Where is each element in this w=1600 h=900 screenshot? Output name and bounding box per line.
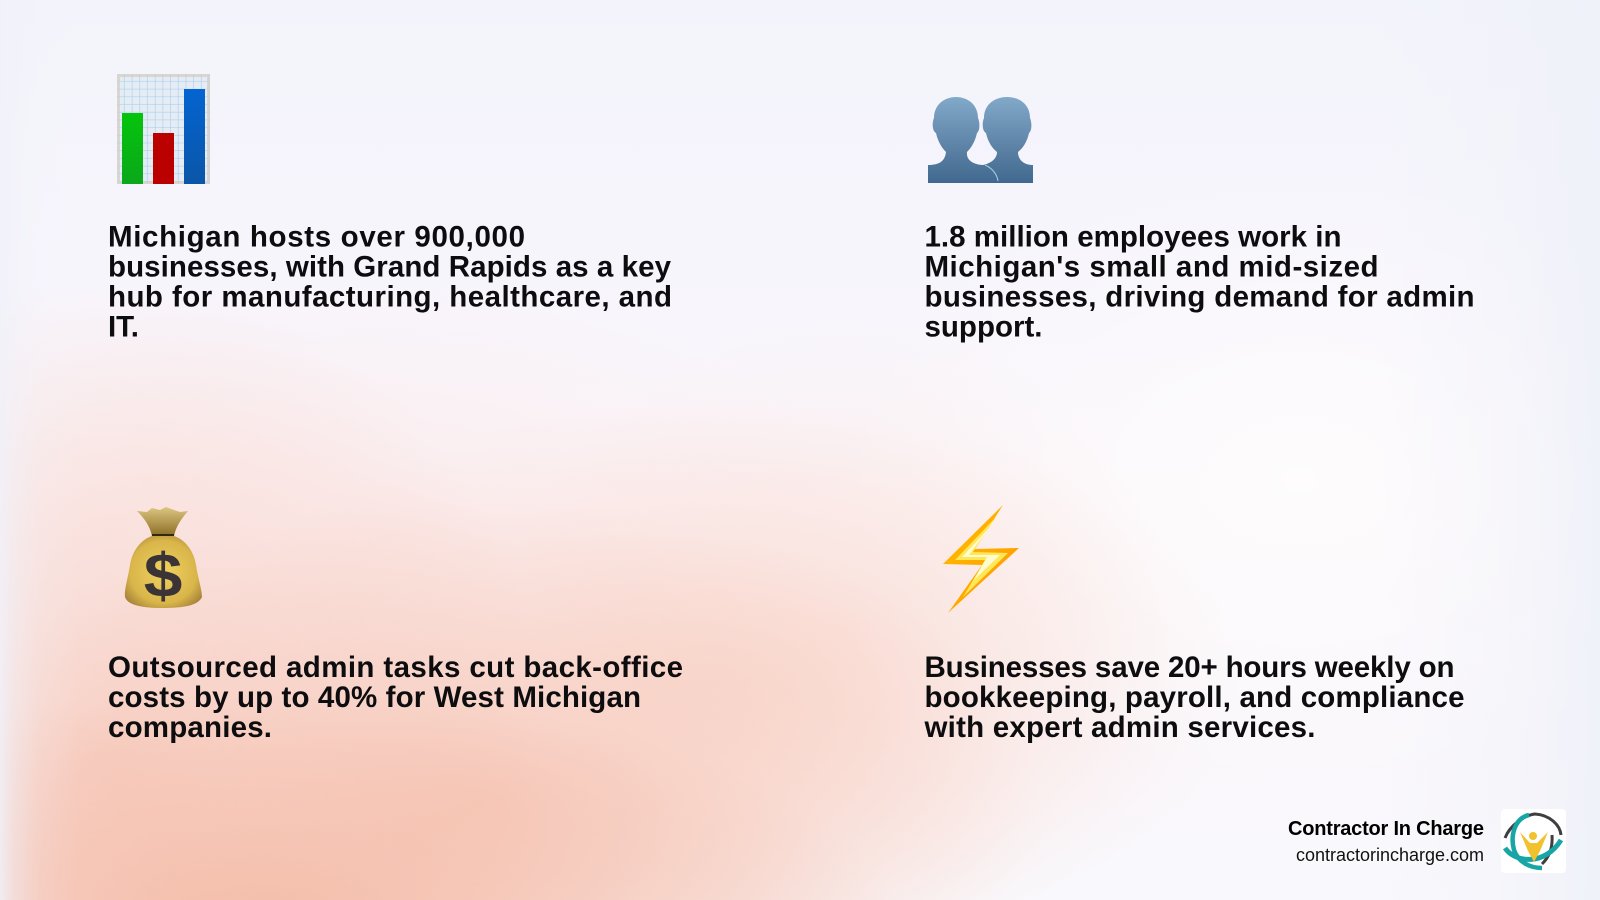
brand url: contractorincharge.com	[1296, 845, 1484, 865]
icon: brand logo	[1501, 809, 1566, 873]
text: cost savings fact: Outsourced admin tasks cut back-office	[108, 651, 683, 684]
text: employees fact: support.	[924, 310, 1042, 344]
panel: time savings	[924, 505, 1469, 744]
text: employees fact: Michigan's small and mid-sized	[924, 250, 1378, 284]
panel: businesses	[108, 74, 676, 344]
text: employees fact: businesses, driving demand for admin	[924, 280, 1474, 314]
icon: bar chart	[117, 74, 210, 184]
text: time savings fact: bookkeeping, payroll, and compliance	[924, 681, 1464, 714]
text: cost savings fact: companies.	[108, 711, 272, 744]
panel: employees	[924, 97, 1479, 344]
text: time savings fact: Businesses save 20+ hours weekly on	[924, 651, 1454, 684]
text: cost savings fact: costs by up to 40% for West Michigan	[108, 681, 641, 714]
brand footer	[1288, 809, 1566, 873]
text: time savings fact: with expert admin services.	[924, 711, 1316, 744]
icon: money bag: $	[144, 540, 182, 610]
panel: cost savings	[108, 507, 687, 744]
icon: money bag	[125, 507, 202, 610]
brand name: Contractor In Charge	[1288, 818, 1484, 840]
text: businesses fact: Michigan hosts over 900,000	[108, 220, 525, 254]
icon: two people silhouettes	[928, 97, 1033, 183]
text: employees fact: 1.8 million employees work in	[924, 220, 1342, 254]
text: businesses fact: hub for manufacturing, healthcare, and	[108, 280, 672, 314]
text: businesses fact: businesses, with Grand Rapids as a key	[108, 250, 672, 284]
text: businesses fact: IT.	[108, 310, 139, 344]
icon: lightning bolt	[943, 505, 1019, 613]
